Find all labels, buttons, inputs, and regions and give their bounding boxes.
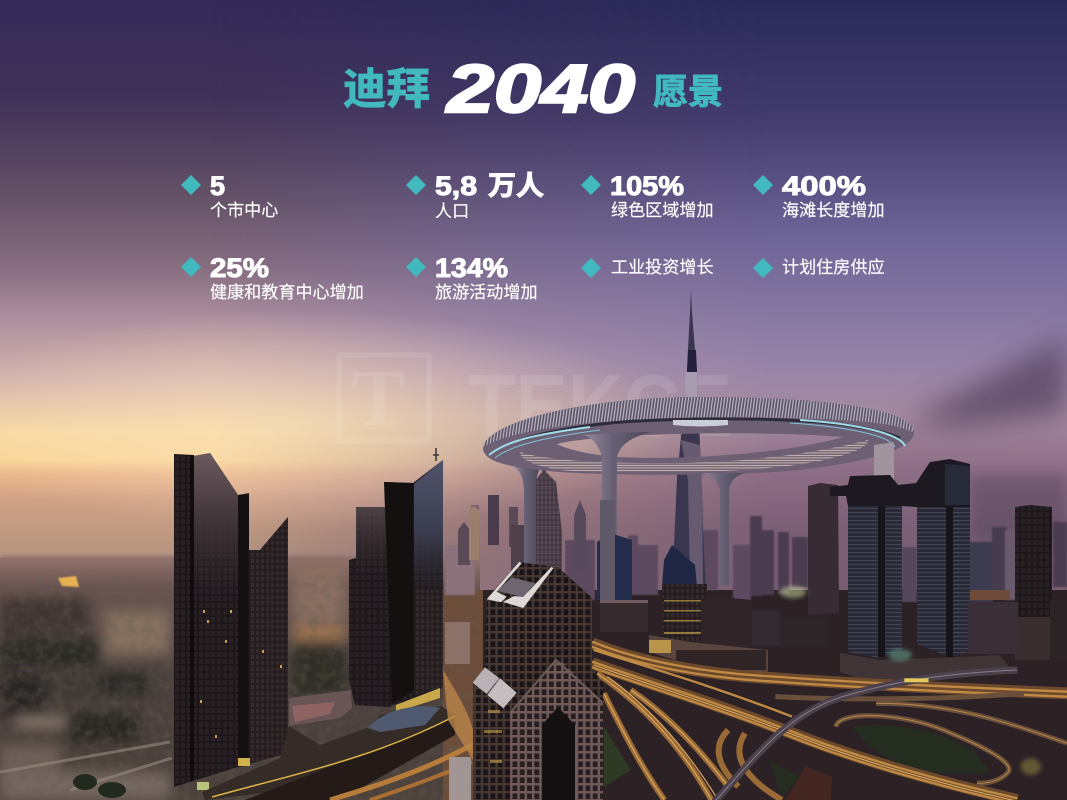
right low blocks xyxy=(968,602,1018,654)
metro viaduct xyxy=(715,670,1017,800)
stat: population: 人口 xyxy=(435,202,469,221)
stat: housing supply: 计划住房供应 xyxy=(782,258,885,277)
stat: population: 5,8 xyxy=(435,171,477,201)
dark block xyxy=(701,597,752,650)
glow patches xyxy=(888,649,912,661)
stat: beach length: 海滩长度增加 xyxy=(782,201,885,220)
low block left xyxy=(600,600,648,632)
stat: population xyxy=(406,171,544,221)
twin tower podium xyxy=(840,653,1010,682)
low block right xyxy=(780,617,828,647)
stat: 5 city centres xyxy=(181,171,278,220)
stat: industrial investment: 工业投资增长 xyxy=(611,258,714,277)
stat: health and education xyxy=(181,253,364,302)
mid-ground city blocks xyxy=(597,500,1067,682)
lower lattice xyxy=(510,660,603,800)
roof panels xyxy=(497,577,535,597)
right twin xyxy=(917,507,970,657)
stat: green areas: 绿色区域增加 xyxy=(611,201,714,220)
left twin xyxy=(848,505,902,658)
watermark logo xyxy=(339,355,732,455)
main left pillar xyxy=(583,432,650,600)
center twin tower xyxy=(349,448,443,712)
glass dome xyxy=(662,545,697,587)
stat: health and education: 25% xyxy=(210,253,269,283)
stat: tourism: 134% xyxy=(435,253,508,283)
right twin towers xyxy=(808,459,1056,660)
yellow-lit block xyxy=(662,584,707,641)
right pillar xyxy=(874,442,894,482)
grass patches xyxy=(853,725,990,773)
dark underside line xyxy=(520,419,900,440)
stat: 5 city centres: 5 xyxy=(210,171,225,201)
stat: green areas xyxy=(581,171,714,220)
ring pillars behind xyxy=(513,467,540,580)
upper tower body xyxy=(473,562,603,800)
stat: beach length xyxy=(753,171,885,220)
highway interchange xyxy=(592,642,1067,800)
title: 2040 xyxy=(445,51,635,127)
sky background xyxy=(0,0,1067,590)
watermark logo: T xyxy=(352,355,405,443)
title xyxy=(343,51,723,127)
ground xyxy=(0,556,1067,800)
mall podium and street xyxy=(202,622,473,800)
lower left section xyxy=(473,683,510,800)
stat: tourism xyxy=(406,253,538,302)
podium xyxy=(649,635,768,673)
slim tower xyxy=(808,483,839,615)
Burj Khalifa tower xyxy=(672,290,706,590)
mid pillar xyxy=(702,473,745,585)
far right tower xyxy=(1015,505,1052,617)
stat: green areas: 105% xyxy=(610,171,684,201)
front tower with white roof xyxy=(473,562,603,800)
left twin-peak tower xyxy=(174,453,288,790)
blue light strips xyxy=(489,427,590,455)
stat: tourism: 旅游活动增加 xyxy=(435,283,538,302)
ring body xyxy=(483,397,914,475)
stat: population: 万人 xyxy=(488,171,544,201)
sky ring structure xyxy=(483,397,914,600)
outer patterned band xyxy=(483,397,914,447)
sky bridge xyxy=(830,459,970,507)
title: 愿景 xyxy=(653,73,723,112)
black recess xyxy=(542,707,575,800)
watermark logo: TEKCE xyxy=(468,356,732,455)
stat: 5 city centres: 个市中心 xyxy=(210,201,278,220)
pod xyxy=(673,420,728,426)
lower inner deck xyxy=(520,440,868,472)
blue glass tower xyxy=(597,533,632,600)
title: 迪拜 xyxy=(343,66,430,114)
distant skyline xyxy=(445,447,1067,605)
ridge frame xyxy=(510,660,603,800)
stat: beach length: 400% xyxy=(782,171,866,201)
stat: health and education: 健康和教育中心增加 xyxy=(210,283,364,302)
